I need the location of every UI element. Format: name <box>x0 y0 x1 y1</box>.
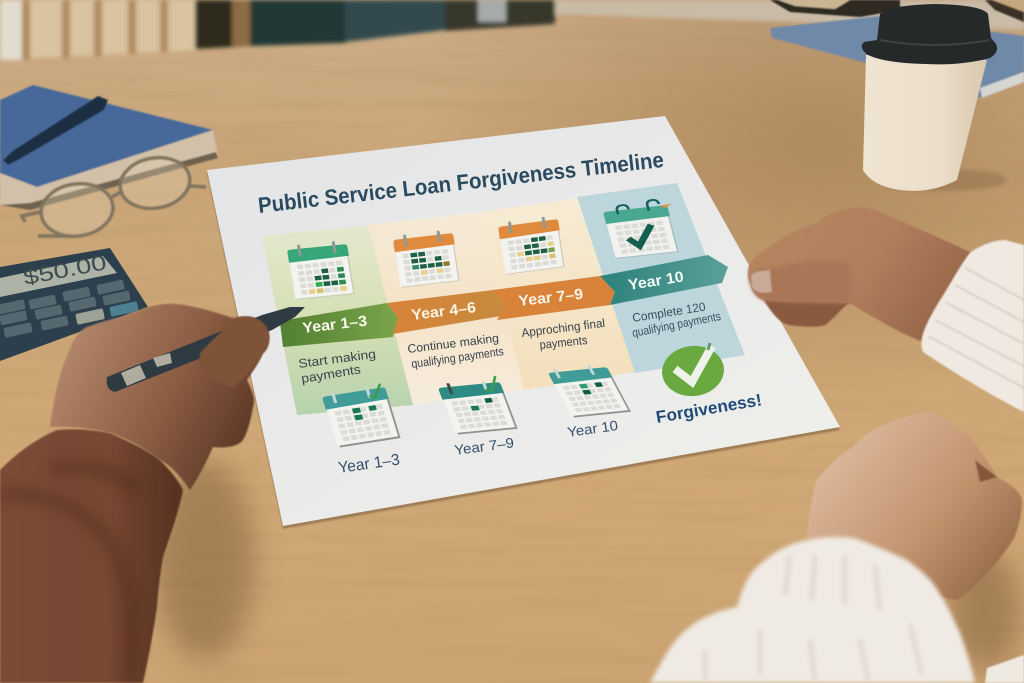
blurred room background <box>0 0 1024 60</box>
description: start making payments: Start making <box>298 347 377 371</box>
banner: year 10 <box>600 255 728 305</box>
lower label: year 7-9: Year 7–9 <box>453 434 515 458</box>
calendar: year 10 top with check <box>601 198 684 259</box>
description: start making payments: payments <box>300 362 362 386</box>
calendar: year 4-6 top <box>393 230 460 288</box>
left thumb <box>200 316 269 387</box>
description: complete 120 qualifying payments: Complete 120 <box>631 300 707 325</box>
notebook with pen <box>0 85 218 210</box>
title: Public Service Loan Forgiveness Timeline <box>257 147 665 218</box>
description: approaching final payments <box>521 316 606 352</box>
left hand palm <box>50 304 269 490</box>
lower label: year 1-3: Year 1–3 <box>337 451 401 477</box>
right sweater cuff <box>921 240 1024 412</box>
panel: year 1-3 <box>262 225 413 415</box>
banner: year 4-6 <box>387 290 505 334</box>
calendar: year 7-9 top <box>498 216 565 275</box>
lower right hand <box>807 413 1022 600</box>
description: start making payments <box>298 347 377 386</box>
banner: year 1-3 <box>280 303 398 347</box>
description: approaching final payments: payments <box>539 333 588 352</box>
pen on notebook <box>3 96 108 165</box>
banner: year 7-9: Year 7–9 <box>518 286 584 310</box>
calendar: year 7-9 lower <box>436 376 518 435</box>
banner: year 4-6: Year 4–6 <box>410 299 477 324</box>
description: approaching final payments: Approching final <box>521 316 606 340</box>
lower sweater sleeve <box>650 537 1024 683</box>
calculator keys <box>0 279 139 338</box>
panel: year 10 <box>577 183 745 373</box>
left sleeve <box>0 429 183 683</box>
infographic sheet <box>207 116 840 529</box>
panel: year 4-6 <box>368 212 524 405</box>
left hand with pen <box>50 304 305 490</box>
calendar: year 1-3 lower <box>321 383 401 448</box>
description: continue making qualifying payments <box>407 331 505 371</box>
coffee cup <box>862 4 1007 191</box>
forgiveness label: Forgiveness! <box>654 390 763 427</box>
eyeglasses <box>22 152 206 241</box>
calendar: year 1-3 top <box>287 241 355 300</box>
panel: year 7-9 <box>480 198 635 390</box>
notebook and glasses, top right <box>770 0 1024 98</box>
banner: year 1-3: Year 1–3 <box>302 313 368 337</box>
calculator <box>0 248 148 361</box>
right hand holding sheet <box>748 208 970 342</box>
calculator display reading: $50.00 <box>22 251 108 290</box>
icon: forgiveness check badge <box>660 343 726 399</box>
description: continue making qualifying payments: qualifying payments <box>410 344 505 371</box>
pen <box>107 307 305 392</box>
lower label: year 10: Year 10 <box>566 417 619 440</box>
description: continue making qualifying payments: Continue making <box>407 331 500 356</box>
description: complete 120 qualifying payments: qualifying payments <box>631 309 722 340</box>
banner: year 10: Year 10 <box>627 268 685 294</box>
calendar: year 10 lower <box>547 364 631 418</box>
banner: year 7-9 <box>493 276 615 320</box>
